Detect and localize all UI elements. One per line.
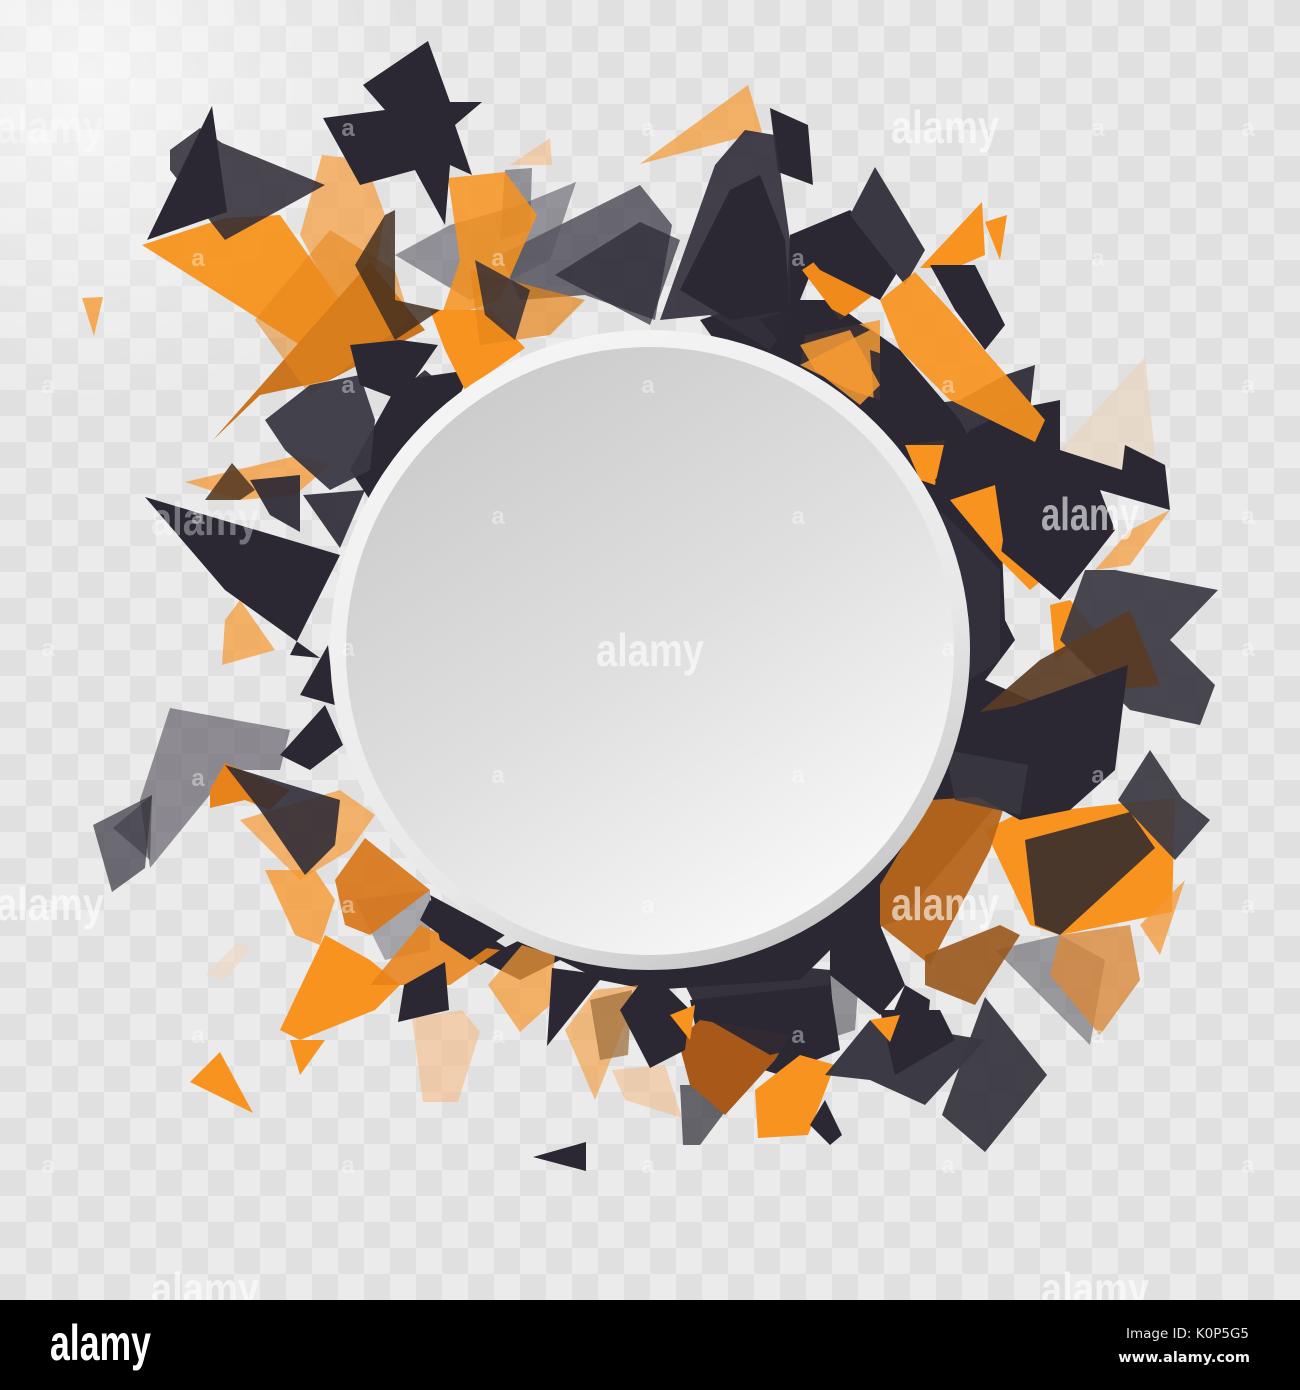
watermarks: a [191, 1022, 205, 1049]
watermarks: a [791, 1022, 805, 1049]
watermarks: a [341, 115, 355, 142]
watermarks: a [341, 372, 355, 399]
watermarks: a [41, 372, 55, 399]
image id: Image ID: K0P5G5 [1126, 1326, 1249, 1342]
watermarks: a [941, 1152, 955, 1179]
watermarks: a [1091, 762, 1105, 789]
watermarks: a [1241, 503, 1255, 530]
watermarks: a [1241, 892, 1255, 919]
watermarks: a [941, 372, 955, 399]
watermarks: a [1091, 245, 1105, 272]
website: www.alamy.com [1118, 1350, 1250, 1366]
watermarks: alamy [891, 878, 999, 930]
watermarks: alamy [891, 101, 999, 153]
watermarks: alamy [151, 1263, 259, 1315]
watermarks: a [341, 1152, 355, 1179]
footer bar [0, 1300, 1300, 1390]
watermarks: a [791, 762, 805, 789]
watermarks: a [641, 115, 655, 142]
watermarks: a [41, 1152, 55, 1179]
watermarks: a [1091, 1022, 1105, 1049]
watermarks: a [491, 245, 505, 272]
watermarks: a [791, 245, 805, 272]
watermarks: a [641, 892, 655, 919]
watermarks: a [191, 503, 205, 530]
watermarks: a [1241, 372, 1255, 399]
watermarks: a [191, 245, 205, 272]
watermarks: a [941, 635, 955, 662]
watermarks: alamy [1041, 488, 1139, 540]
watermarks: a [1091, 115, 1105, 142]
watermarks: a [641, 372, 655, 399]
shards: dark fill ring behind the badge [350, 225, 1030, 1075]
watermarks: a [641, 1152, 655, 1179]
watermarks: alamy [596, 624, 704, 676]
footer logo: alamy [50, 1315, 151, 1371]
watermarks: a [1241, 635, 1255, 662]
shards: dark layer [145, 41, 1218, 1171]
watermarks: a [791, 503, 805, 530]
watermarks: a [341, 892, 355, 919]
watermarks: a [1241, 115, 1255, 142]
watermarks: alamy [1041, 1263, 1149, 1315]
watermarks: a [1241, 1152, 1255, 1179]
watermarks: a [341, 635, 355, 662]
shards: bright orange overlay at upper right [670, 272, 1045, 1042]
watermarks: a [491, 1022, 505, 1049]
shards: pale and gray back layer [93, 85, 1155, 1145]
white circular badge [330, 330, 970, 970]
watermarks: a [491, 762, 505, 789]
watermarks: alamy [151, 493, 259, 545]
watermarks: a [41, 892, 55, 919]
watermarks: a [491, 503, 505, 530]
watermarks: a [41, 635, 55, 662]
watermarks: a [191, 765, 205, 792]
shards: orange layer [82, 155, 1185, 1138]
